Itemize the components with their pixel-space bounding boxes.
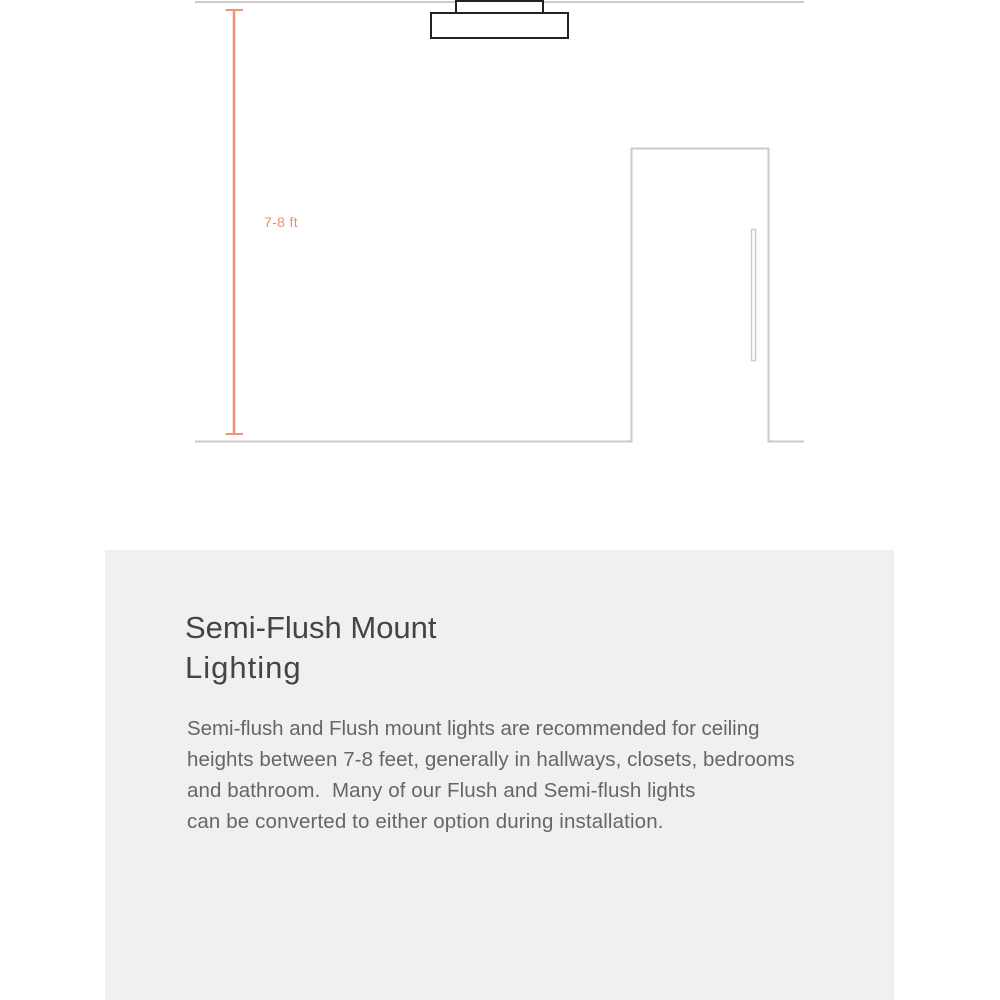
ceiling line	[195, 1, 804, 3]
text block: description	[187, 717, 795, 833]
icon: semi-flush ceiling light	[431, 1, 568, 38]
text block: description: can be converted to either option during installation.	[187, 810, 664, 833]
room elevation diagram	[195, 0, 804, 442]
height dimension arrow	[226, 10, 243, 434]
panel: description	[105, 550, 894, 1000]
heading: Semi-Flush Mount	[185, 610, 437, 645]
text block: description: Semi-flush and Flush mount lights are recommended for ceiling	[187, 717, 759, 740]
text block: description: heights between 7-8 feet, generally in hallways, closets, bedrooms	[187, 748, 795, 771]
door handle	[752, 230, 756, 360]
heading	[185, 610, 437, 685]
heading: Lighting	[185, 650, 302, 685]
text block: description: and bathroom. Many of our Flush and Semi-flush lights	[187, 779, 696, 802]
height label: 7-8 ft	[264, 214, 298, 230]
floor line and door outline	[195, 148, 804, 442]
